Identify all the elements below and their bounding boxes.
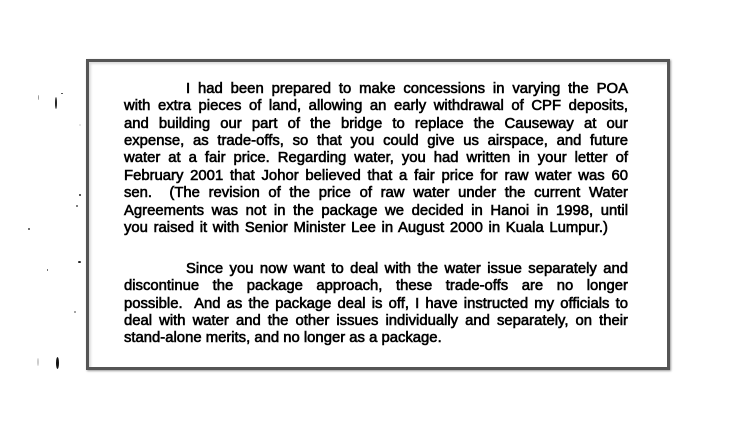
text block: first paragraph: and building our part of the bridge to replace the Causeway at our (124, 116, 628, 132)
text block: first paragraph: sen. (The revision of the price of raw water under the current Water (124, 185, 628, 201)
text block: first paragraph: you raised it with Senior Minister Lee in August 2000 in Kuala Lumpur.) (124, 220, 608, 236)
text block: first paragraph: with extra pieces of land, allowing an early withdrawal of CPF deposits, (124, 98, 628, 114)
text block: second paragraph: deal with water and the other issues individually and separately, on their (124, 313, 628, 329)
panel: letter excerpt frame (86, 59, 670, 370)
text block: first paragraph: water at a fair price. Regarding water, you had written in your letter of (124, 150, 628, 166)
text block: second paragraph: discontinue the package approach, these trade-offs are no longer (124, 278, 628, 294)
text block: first paragraph (124, 81, 628, 236)
text block: first paragraph: Agreements was not in the package we decided in Hanoi in 1998, until (124, 203, 628, 219)
text block: first paragraph: I had been prepared to make concessions in varying the POA (186, 81, 628, 97)
text block: second paragraph: possible. And as the package deal is off, I have instructed my officials to (124, 296, 628, 312)
text block: first paragraph: February 2001 that Johor believed that a fair price for raw water was 60 (124, 168, 628, 184)
text block: second paragraph (124, 261, 628, 346)
text block: second paragraph: Since you now want to deal with the water issue separately and (186, 261, 628, 277)
text block: second paragraph: stand-alone merits, and no longer as a package. (124, 330, 442, 346)
text block: first paragraph: expense, as trade-offs, so that you could give us airspace, and future (124, 133, 628, 149)
scan marks in left margin (28, 93, 81, 369)
